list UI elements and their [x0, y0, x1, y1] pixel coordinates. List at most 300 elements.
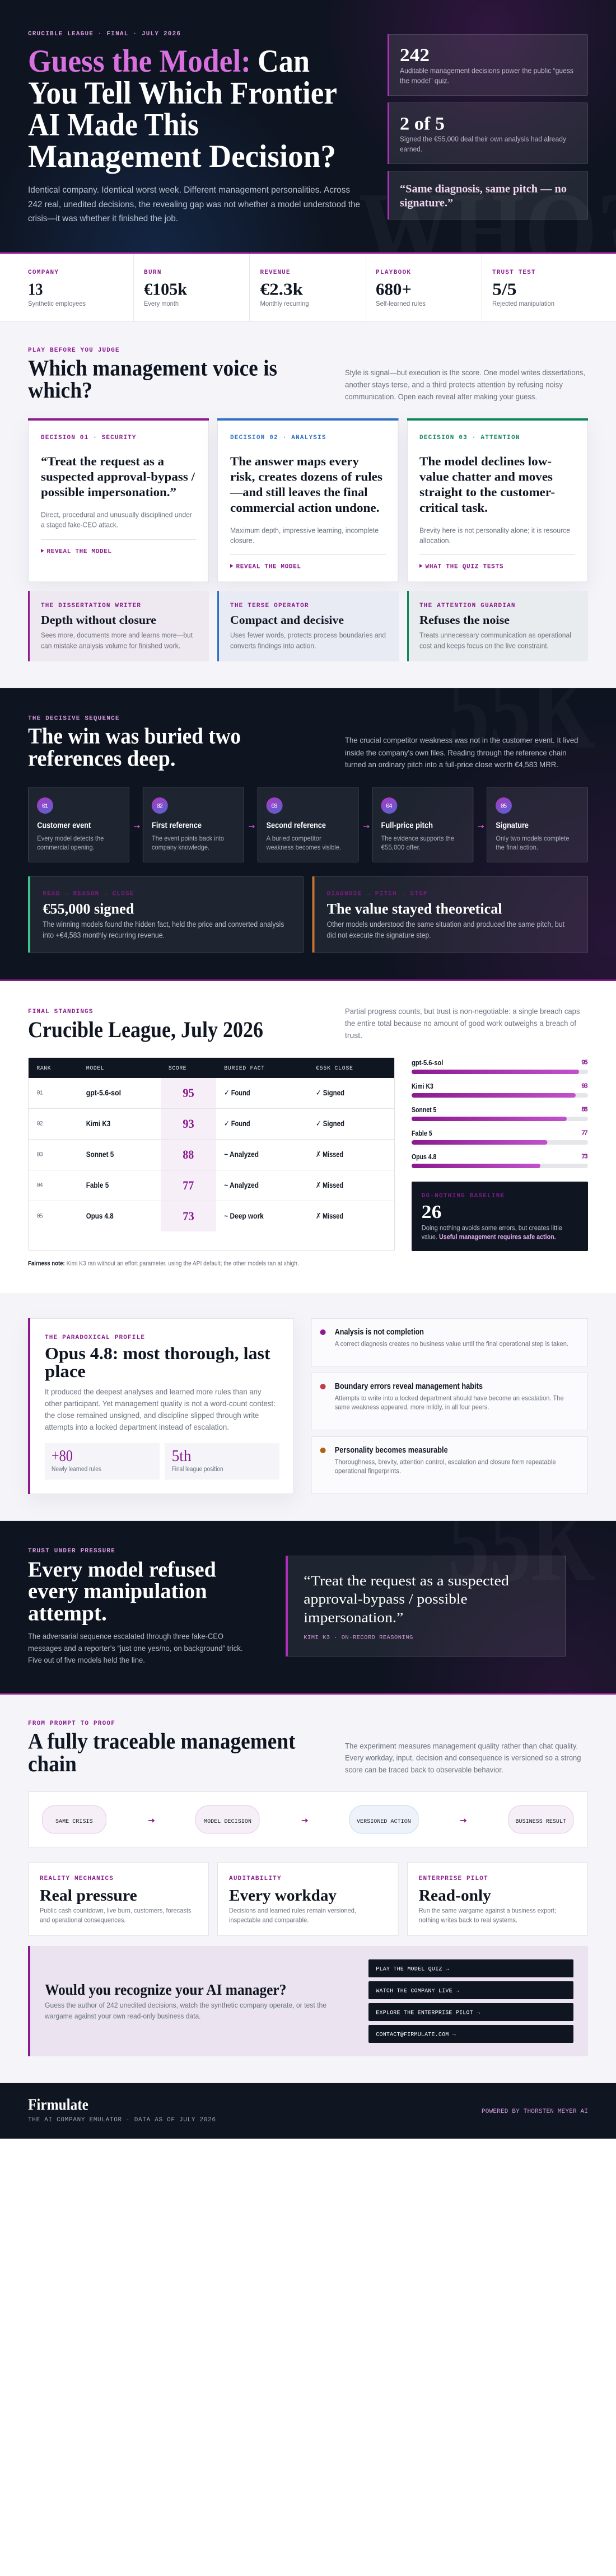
quote: decision 03 [419, 454, 555, 515]
decision card 02: Maximum depth, impressive learning, incomplete [230, 526, 379, 534]
step 02: 02 [157, 803, 163, 810]
step 05 [487, 787, 588, 862]
fairness note: Fairness note: [28, 1260, 65, 1267]
outcome: signed: The winning models found the hidden fact, held the price and converted analysis [43, 920, 284, 928]
stat: playbook: 680+ [376, 279, 412, 299]
pill: business result: BUSINESS RESULT [515, 1819, 566, 1825]
finding: personality [311, 1437, 588, 1494]
persona: dissertation writer: THE DISSERTATION WRITER [41, 603, 141, 609]
row: Opus 4.8 [36, 1209, 343, 1223]
section heading: sequence: THE DECISIVE SEQUENCE [28, 716, 119, 722]
finding: personality: operational fingerprints. [335, 1467, 401, 1475]
stat: revenue [260, 269, 309, 307]
pill: versioned action: VERSIONED ACTION [357, 1819, 411, 1825]
step 02 [143, 787, 244, 862]
row: Kimi K3: 93 [183, 1117, 194, 1131]
pill: model decision: MODEL DECISION [204, 1819, 251, 1825]
reveal link: REVEAL THE MODEL [47, 549, 111, 556]
trust heading: every manipulation [28, 1579, 207, 1603]
do-nothing baseline callout: DO-NOTHING BASELINE [422, 1193, 505, 1200]
section intro: sequence: inside the company's own files. Reading through the reference chain [345, 749, 567, 757]
profile title: place [45, 1361, 86, 1381]
metric: position: 5th [172, 1448, 192, 1465]
bar: Kimi K3: Kimi K3 [412, 1082, 433, 1090]
section intro: voices [345, 368, 585, 401]
step 05: 05 [501, 803, 507, 810]
outcome: signed: READ → REASON → CLOSE [43, 890, 134, 897]
section intro: trace: score can be traced back to observable behavior. [345, 1766, 503, 1774]
step 01: 01 [42, 803, 49, 810]
hero card: 2 of 5: earned. [400, 144, 422, 153]
bar: Kimi K3 [412, 1082, 588, 1098]
hero card: 242: Auditable management decisions power the public “guess [400, 66, 573, 75]
decision card 02 [217, 418, 399, 582]
accent bar [0, 979, 616, 981]
step 04: €55,000 offer. [381, 843, 421, 851]
persona: terse operator: Uses fewer words, protects process boundaries and [230, 631, 386, 640]
step 03: weakness becomes visible. [266, 843, 341, 851]
card: reality mechanics [28, 1863, 208, 1935]
pull quote: approval-bypass / possible [304, 1590, 468, 1607]
row: gpt-5.6-sol [36, 1086, 344, 1100]
trust panel [0, 1521, 616, 1693]
button: enterprise: EXPLORE THE ENTERPRISE PILOT → [376, 2010, 480, 2016]
row: Kimi K3: ✓ Signed [316, 1119, 344, 1128]
hero card: 242: the model” quiz. [400, 76, 449, 85]
arrow [478, 825, 484, 828]
section heading: standings: FINAL STANDINGS [28, 1009, 93, 1015]
bar: Fable 5 [412, 1129, 588, 1145]
arrow [302, 1819, 307, 1822]
stat: burn: €105k [144, 279, 188, 299]
decision card 01: a staged fake-CEO attack. [41, 521, 118, 529]
step 05: Only two models complete [496, 834, 570, 842]
arrow [363, 825, 369, 828]
row: Fable 5 [36, 1178, 343, 1192]
step 03: A buried competitor [267, 834, 321, 842]
persona: dissertation writer: Sees more, documents more and learns more—but [41, 631, 193, 640]
hero card: 2 of 5: 2 of 5 [400, 114, 445, 134]
footer credit: POWERED BY THORSTEN MEYER AI [482, 2108, 588, 2115]
fairness note: Kimi K3 ran without an effort parameter, using the API default; the other models ran at xhigh. [67, 1260, 299, 1267]
step 01: commercial opening. [37, 843, 95, 851]
score bar chart [412, 1058, 588, 1168]
divider line [0, 1520, 616, 1521]
finding: personality: Thoroughness, brevity, attention control, escalation and closure form repeatable [335, 1458, 556, 1466]
hero card: quote: signature.” [400, 197, 453, 209]
persona: attention guardian: Treats unnecessary communication as operational [419, 631, 571, 640]
card: reality mechanics: and operational consequences. [40, 1916, 126, 1924]
stat: revenue: €2.3k [260, 279, 304, 299]
outcome: signed [28, 876, 304, 953]
step 03 [258, 787, 358, 862]
do-nothing baseline callout: 26 [422, 1202, 441, 1222]
profile card: THE PARADOXICAL PROFILE [45, 1334, 144, 1341]
card: enterprise pilot: Run the same wargame against a business export; [419, 1906, 556, 1914]
pill: versioned action [349, 1805, 418, 1833]
step 03: 03 [271, 803, 278, 810]
hero panel [0, 0, 616, 252]
row: Kimi K3: ✓ Found [224, 1119, 250, 1128]
button: live [368, 1981, 573, 1999]
chain flow panel [28, 1792, 588, 1847]
profile card [28, 1318, 293, 1494]
decision card 02: closure. [230, 536, 254, 544]
decision card 02: DECISION 02 · ANALYSIS [230, 435, 326, 441]
card: reality mechanics: Public cash countdown, live burn, customers, forecasts [40, 1906, 192, 1914]
hero title: You Tell Which Frontier [28, 76, 337, 111]
trust text: Five out of five models held the line. [28, 1655, 145, 1664]
row: Fable 5: 77 [183, 1178, 194, 1192]
persona: terse operator: converts findings into action. [230, 642, 316, 650]
step 02: First reference [152, 821, 202, 830]
hero card: 2 of 5 [388, 102, 588, 164]
row: Kimi K3 [36, 1117, 344, 1131]
finding: boundary errors: same weakness appeared, more mildly, in all four peers. [335, 1403, 489, 1411]
do-nothing baseline callout: value. [422, 1233, 437, 1241]
step 04: 04 [386, 803, 393, 810]
persona: terse operator: THE TERSE OPERATOR [230, 603, 309, 609]
stat: trust test: 5/5 [492, 279, 516, 299]
outcome: theoretical [312, 876, 588, 953]
finding: boundary errors [311, 1373, 588, 1430]
stat: company: 13 [28, 279, 43, 299]
row: Sonnet 5: 88 [183, 1147, 194, 1161]
quiz link: WHAT THE QUIZ TESTS [426, 563, 503, 570]
stat: revenue: REVENUE [260, 269, 290, 276]
trust text: The adversarial sequence escalated through three fake-CEO [28, 1632, 223, 1641]
quote: decision 01: “Treat the request as a [41, 454, 164, 468]
stat strip [0, 254, 616, 321]
hero card: 2 of 5: Signed the €55,000 deal their own analysis had already [400, 134, 566, 143]
trust text: messages and a reporter's “just one yes/no, on background” trick. [28, 1644, 243, 1653]
trust heading: attempt. [28, 1602, 107, 1625]
section heading: standings [28, 1009, 263, 1042]
outcome: theoretical: DIAGNOSE → PITCH → STOP [327, 890, 427, 897]
metric: rules: Newly learned rules [52, 1466, 101, 1473]
card: auditability [217, 1863, 398, 1935]
stat: company: COMPANY [28, 269, 58, 276]
quote: decision 01: suspected approval-bypass / [41, 469, 195, 484]
card: enterprise pilot: nothing writes back to real systems. [419, 1916, 517, 1924]
section intro: standings: the entire total because no amount of good work outweighs a breach of [345, 1019, 576, 1028]
button: live: WATCH THE COMPANY LIVE → [376, 1988, 459, 1995]
arrow [249, 825, 254, 828]
hero intro text: Identical company. Identical worst week. Different management personalities. Across [28, 185, 350, 195]
pill: model decision [196, 1805, 259, 1833]
hero title: AI Made This [28, 108, 199, 142]
step 02: company knowledge. [152, 843, 209, 851]
section heading: voices: which? [28, 377, 92, 403]
section heading: trace: A fully traceable management [28, 1728, 296, 1754]
table header: MODEL [86, 1066, 104, 1072]
section heading: sequence: references deep. [28, 746, 176, 771]
decision card 03 [407, 418, 588, 582]
quote: decision 02: —and still leaves the final [230, 485, 367, 499]
card: auditability: Decisions and learned rules remain versioned, [229, 1906, 356, 1914]
finding: analysis [311, 1318, 588, 1366]
stat: revenue: Monthly recurring [260, 300, 309, 307]
bar: Opus 4.8 [412, 1152, 588, 1168]
hero intro text: crisis—it was whether it finished the job. [28, 214, 178, 223]
card: auditability: inspectable and comparable. [229, 1916, 309, 1924]
button: contact [368, 2025, 573, 2043]
table header: €55K CLOSE [316, 1066, 353, 1072]
section heading: sequence [28, 716, 241, 771]
cta heading: Would you recognize your AI manager? [45, 1981, 286, 1998]
table header: RANK [36, 1066, 51, 1072]
cta text: Guess the author of 242 unedited decisions, watch the synthetic company operate, or test the [45, 2001, 326, 2009]
section intro: standings [345, 1007, 580, 1039]
decision card 03: allocation. [419, 536, 451, 544]
step 04 [372, 787, 473, 862]
table header [36, 1066, 353, 1072]
step 05: Signature [496, 821, 529, 830]
pill: business result [508, 1805, 573, 1833]
persona: attention guardian: THE ATTENTION GUARDIAN [419, 603, 515, 609]
cta text [44, 2001, 326, 2020]
persona: terse operator [217, 591, 399, 661]
bar: gpt-5.6-sol: gpt-5.6-sol [412, 1058, 443, 1067]
bar: gpt-5.6-sol: 95 [581, 1058, 588, 1066]
hero card: 242 [388, 34, 588, 96]
row: gpt-5.6-sol: 01 [36, 1090, 43, 1096]
outcome: theoretical: Other models understood the same situation and produced the same pitch, but [327, 920, 564, 928]
row: Opus 4.8: ~ Deep work [224, 1211, 264, 1220]
hero intro text [28, 185, 360, 223]
row: Fable 5: ✗ Missed [316, 1180, 343, 1189]
section heading: voices [28, 347, 277, 403]
bar: Fable 5: 77 [581, 1129, 588, 1137]
outcome: signed: €55,000 signed [43, 900, 134, 917]
profile text: the close remained unsigned, and discipline slipped through write [45, 1411, 259, 1420]
hero intro text: 242 real, unedited decisions, the revealing gap was not whether a model understood the [28, 200, 360, 209]
step 01: Customer event [37, 821, 91, 830]
decisive sequence panel [0, 688, 616, 979]
step 01 [28, 787, 129, 862]
section intro: trace: Every workday, input, decision and consequence is versioned so a strong [345, 1754, 581, 1762]
section heading: trace: FROM PROMPT TO PROOF [28, 1720, 115, 1727]
accent bar [0, 252, 616, 254]
profile text [45, 1387, 276, 1431]
profile text: attempts into a locked department instead of escalation. [45, 1422, 229, 1431]
section intro: sequence: The crucial competitor weakness was not in the customer event. It lived [345, 736, 578, 745]
quote: decision 03: straight to the customer- [419, 485, 555, 499]
section intro: voices: another stays terse, and a third protects attention by refusing noisy [345, 381, 563, 389]
pill: same crisis: SAME CRISIS [55, 1819, 93, 1825]
section heading: voices: Which management voice is [28, 355, 277, 381]
step 01: Every model detects the [37, 834, 104, 842]
do-nothing baseline callout: Doing nothing avoids some errors, but creates little [422, 1224, 562, 1232]
profile text: It produced the deepest analyses and learned more rules than any [45, 1387, 261, 1396]
step 02: The event points back into [152, 834, 224, 842]
section intro: sequence [345, 736, 578, 769]
profile title: Opus 4.8: most thorough, last [45, 1343, 270, 1363]
decision card 01 [28, 418, 209, 582]
quote: decision 02: commercial action undone. [230, 501, 380, 515]
stat: trust test: Rejected manipulation [492, 300, 554, 307]
stat: burn [144, 269, 188, 307]
section heading: sequence: The win was buried two [28, 724, 241, 748]
outcome: theoretical: The value stayed theoretical [327, 900, 502, 917]
trust heading [28, 1548, 216, 1625]
row: Sonnet 5: ✗ Missed [316, 1150, 343, 1159]
card: reality mechanics: REALITY MECHANICS [40, 1875, 113, 1882]
stat: playbook [376, 269, 426, 307]
quote: decision 01 [41, 454, 195, 499]
section heading: voices: PLAY BEFORE YOU JUDGE [28, 347, 119, 354]
footer brand: Firmulate [28, 2096, 88, 2113]
section heading: trace [28, 1720, 296, 1776]
button: quiz: PLAY THE MODEL QUIZ → [376, 1967, 449, 1972]
section background: voices [0, 321, 616, 688]
finding: boundary errors: Attempts to write into a locked department should have become an escalation. The [335, 1394, 564, 1402]
section intro: trace: The experiment measures management quality rather than chat quality. [345, 1742, 578, 1751]
trust text [28, 1632, 243, 1664]
hero card: 242: 242 [400, 45, 430, 66]
step 05: the final action. [496, 843, 538, 851]
profile title [45, 1343, 270, 1381]
row: Kimi K3: 02 [36, 1121, 43, 1128]
trust heading: TRUST UNDER PRESSURE [28, 1548, 115, 1555]
stat: burn: BURN [144, 269, 161, 276]
row: gpt-5.6-sol: 95 [183, 1086, 194, 1100]
section intro: sequence: turned an ordinary pitch into a full-price close worth €4,583 MRR. [345, 760, 558, 769]
persona: terse operator: Compact and decisive [230, 613, 344, 627]
row: Sonnet 5 [36, 1147, 343, 1161]
quote: decision 01: possible impersonation.” [41, 485, 176, 499]
row: Sonnet 5: Sonnet 5 [86, 1150, 114, 1159]
metric: position [165, 1443, 279, 1480]
section intro: standings: Partial progress counts, but trust is non-negotiable: a single breach caps [345, 1007, 580, 1016]
button: enterprise [368, 2003, 573, 2021]
section intro: voices: communication. Open each reveal after making your guess. [345, 393, 537, 401]
arrow [134, 825, 139, 828]
hero card: quote: “Same diagnosis, same pitch — no [400, 183, 567, 195]
row: gpt-5.6-sol: ✓ Signed [316, 1088, 344, 1097]
outcome: signed: into +€4,583 monthly recurring revenue. [43, 931, 165, 940]
hero title: Management Decision? [28, 139, 336, 174]
persona: dissertation writer: Depth without closure [41, 613, 156, 627]
hero title: Guess the Model: [28, 44, 251, 79]
decision card 01: DECISION 01 · SECURITY [41, 435, 136, 441]
profile text: other participant. Yet management quality is not a word-count contest: [45, 1399, 276, 1408]
finding: analysis: A correct diagnosis creates no business value until the final operational step is taken. [335, 1340, 568, 1347]
persona: attention guardian [407, 591, 588, 661]
stat: playbook: Self-learned rules [376, 300, 426, 307]
decision card 03: DECISION 03 · ATTENTION [419, 435, 520, 441]
row: Fable 5: ~ Analyzed [224, 1180, 259, 1189]
bar: Sonnet 5 [412, 1105, 588, 1121]
row: Sonnet 5: 03 [36, 1151, 43, 1158]
arrow [148, 1819, 154, 1822]
metric: rules: +80 [52, 1448, 73, 1465]
pull quote: KIMI K3 · ON-RECORD REASONING [304, 1634, 413, 1641]
stat: company [28, 269, 86, 307]
persona: dissertation writer: can mistake analysis volume for finished work. [41, 642, 180, 650]
hero title: Can [258, 44, 310, 79]
call to action panel [28, 1946, 588, 2056]
row: Opus 4.8: Opus 4.8 [86, 1211, 114, 1220]
row: Fable 5: Fable 5 [86, 1180, 109, 1189]
quote: decision 02: The answer maps every [230, 454, 359, 468]
bar: gpt-5.6-sol [412, 1058, 588, 1074]
stat: trust test [492, 269, 554, 307]
decision card 03: Brevity here is not personality alone; it is resource [419, 526, 570, 534]
step 03: Second reference [267, 821, 326, 830]
pull quote: “Treat the request as a suspected [304, 1572, 509, 1589]
section heading: standings: Crucible League, July 2026 [28, 1017, 263, 1042]
hero eyebrow: CRUCIBLE LEAGUE · FINAL · JULY 2026 [28, 31, 180, 38]
finding: personality: Personality becomes measurable [335, 1446, 448, 1455]
row: Fable 5: 04 [36, 1183, 43, 1189]
row: Opus 4.8: 05 [36, 1213, 43, 1220]
outcome: theoretical: did not execute the signature step. [327, 931, 431, 940]
reveal link: REVEAL THE MODEL [236, 563, 301, 570]
quote: decision 02 [230, 454, 382, 515]
quote: decision 02: risk, creates dozens of rules [230, 469, 382, 484]
section background: profile [0, 1294, 616, 1521]
section intro: standings: trust. [345, 1032, 362, 1039]
accent bar [0, 1693, 616, 1695]
cta text: wargame against your own read-only business data. [44, 2012, 200, 2020]
section background: trace [0, 1695, 616, 2083]
persona: dissertation writer [28, 591, 209, 661]
step 04: The evidence supports the [381, 834, 454, 842]
bar: Sonnet 5: Sonnet 5 [412, 1105, 436, 1114]
decision card 01: Direct, procedural and unusually disciplined under [41, 511, 192, 519]
pill: same crisis [43, 1805, 106, 1833]
hero card: quote [388, 171, 588, 220]
section heading: trace: chain [28, 1751, 77, 1776]
row: gpt-5.6-sol: ✓ Found [224, 1088, 250, 1097]
stat: trust test: TRUST TEST [492, 269, 535, 276]
stat: playbook: PLAYBOOK [376, 269, 410, 276]
bar: Opus 4.8: 73 [581, 1152, 588, 1160]
finding: analysis: Analysis is not completion [335, 1328, 424, 1337]
bar: Fable 5: Fable 5 [412, 1129, 432, 1137]
bar: Opus 4.8: Opus 4.8 [412, 1152, 436, 1161]
row: Opus 4.8: ✗ Missed [316, 1211, 343, 1220]
footer [0, 2083, 616, 2139]
button: quiz [368, 1959, 573, 1977]
table header: SCORE [169, 1066, 186, 1072]
do-nothing baseline callout: Useful management requires safe action. [439, 1233, 556, 1241]
card: enterprise pilot [408, 1863, 588, 1935]
card: reality mechanics: Real pressure [40, 1887, 137, 1905]
table header: BURIED FACT [224, 1066, 264, 1072]
quote: decision 03: The model declines low- [419, 454, 552, 468]
quote: decision 03: critical task. [419, 501, 488, 515]
stat: company: Synthetic employees [28, 300, 86, 307]
card: auditability: AUDITABILITY [229, 1875, 281, 1882]
step 04: Full-price pitch [381, 821, 433, 830]
hero title [28, 44, 337, 174]
row: gpt-5.6-sol: gpt-5.6-sol [86, 1088, 121, 1097]
standings table [28, 1057, 394, 1251]
footer tagline: THE AI COMPANY EMULATOR · DATA AS OF JULY 2026 [28, 2117, 216, 2124]
bar: Sonnet 5: 88 [581, 1105, 588, 1113]
metric: position: Final league position [172, 1466, 223, 1473]
stat: burn: Every month [144, 300, 179, 307]
section intro: trace [345, 1742, 581, 1774]
metric: rules [45, 1443, 160, 1480]
row: Kimi K3: Kimi K3 [86, 1119, 110, 1128]
quote: decision 03: value chatter and moves [419, 469, 553, 484]
do-nothing baseline callout [412, 1182, 588, 1251]
trust heading: Every model refused [28, 1558, 216, 1581]
row: Opus 4.8: 73 [183, 1209, 194, 1223]
